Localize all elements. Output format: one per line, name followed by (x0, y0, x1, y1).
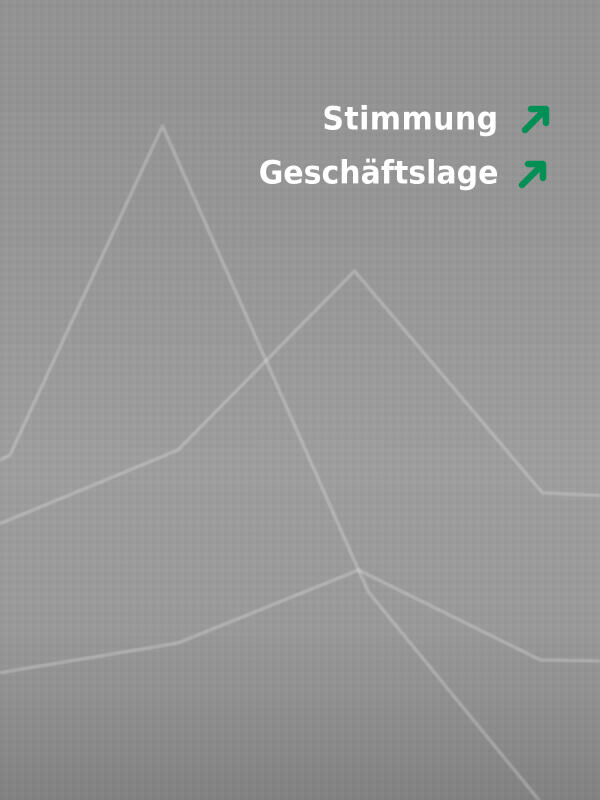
line: series 1 (0, 126, 540, 800)
line: series 2 (0, 271, 600, 524)
line: series 3 (0, 570, 600, 673)
label: Geschäftslage: Geschäftslage (259, 155, 498, 192)
label: Stimmung: Stimmung (322, 101, 498, 138)
